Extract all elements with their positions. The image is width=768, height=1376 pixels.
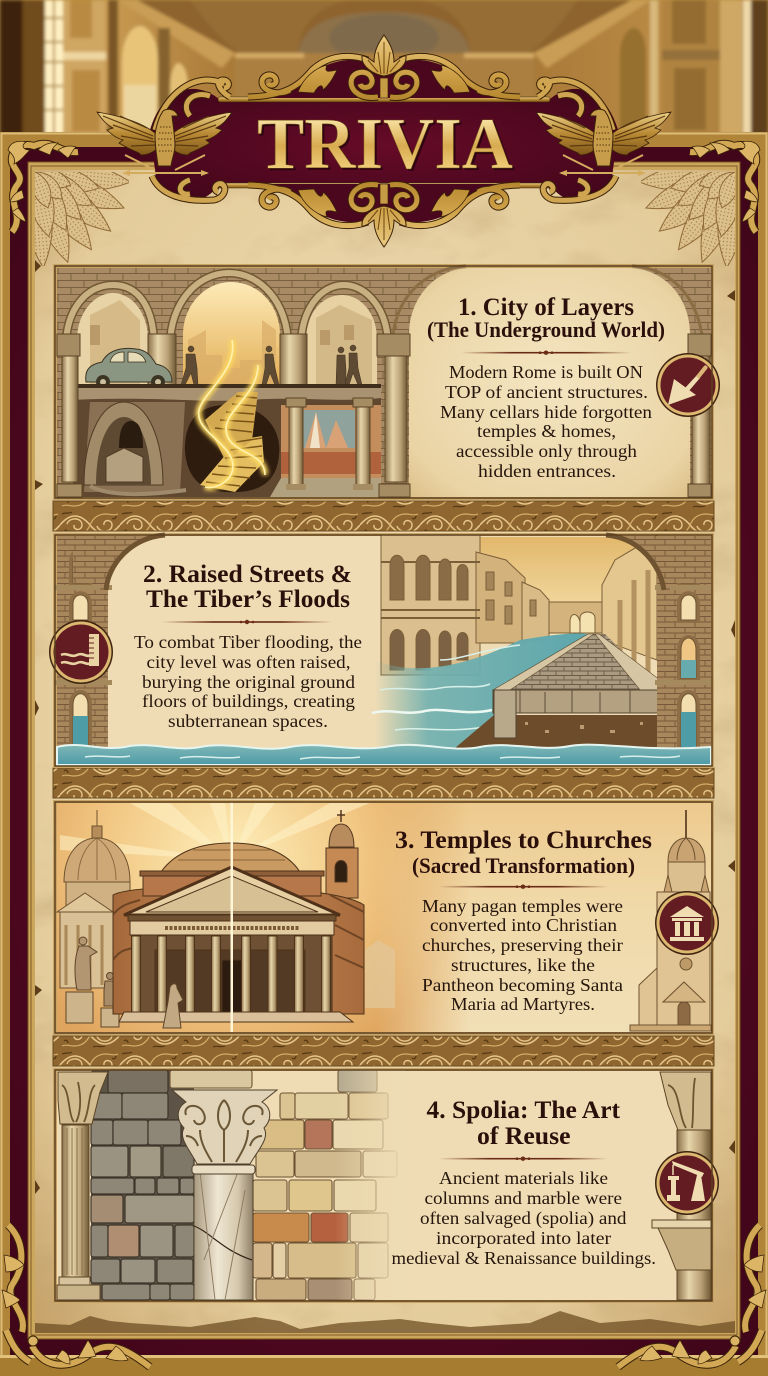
heading: The Tiber’s Floods: [146, 586, 350, 613]
body text: hidden entrances.: [478, 461, 616, 481]
illustration: left fluted column: [57, 1072, 108, 1300]
divider: [438, 884, 608, 889]
text panel: parchment arch: [409, 268, 690, 497]
people: [181, 345, 362, 385]
icon: left eagle: [97, 109, 232, 176]
buildings: [381, 535, 657, 675]
right column: [688, 334, 711, 497]
brick arch spandrels: [57, 535, 711, 590]
left brick tower: [54, 536, 112, 748]
heading: 4. Spolia: The Art: [426, 1097, 621, 1124]
heading: of Reuse: [477, 1123, 570, 1150]
panel 3: Temples to Churches: [53, 800, 719, 1035]
heading: [427, 294, 665, 342]
icon: trowel: [656, 353, 720, 417]
body text: converted into Christian: [430, 915, 617, 935]
illustration: left dome and temple: [57, 810, 130, 988]
body text: structures, like the: [451, 955, 595, 975]
corner mandala: top right: [638, 159, 748, 269]
icon: crane and column: [655, 1151, 719, 1215]
corner scroll: bottom right: [618, 1225, 766, 1367]
panel 4: Spolia: [53, 1068, 719, 1303]
body text: temples & homes,: [477, 421, 616, 441]
title banner: [97, 35, 671, 247]
water band: [57, 745, 711, 765]
body text: medieval & Renaissance buildings.: [392, 1248, 656, 1268]
body text: incorporated into later: [436, 1228, 611, 1248]
heading: [143, 561, 352, 613]
body text: Pantheon becoming Santa: [422, 975, 623, 995]
ornamental band 2: [53, 768, 714, 798]
title shadow: TRIVIA: [259, 105, 515, 186]
fade of wall into parchment: [335, 1070, 405, 1300]
heading: 2. Raised Streets &: [143, 561, 352, 588]
corner mandala: top left: [22, 159, 132, 269]
illustration: distant building: [365, 940, 395, 1008]
icon: temple: [655, 891, 719, 955]
illustration: bell tower: [326, 810, 358, 898]
ornamental band 1: [53, 501, 714, 531]
center column: [377, 334, 410, 497]
car: [86, 348, 172, 389]
background: palace interior: [0, 0, 768, 145]
arch: left and right curves: [106, 535, 664, 590]
body text: Modern Rome is built ON: [449, 362, 643, 382]
body text: burying the original ground: [142, 672, 355, 692]
body text: often salvaged (spolia) and: [420, 1208, 626, 1229]
illustration: statues: [66, 937, 119, 1027]
illustration: dividing light line: [230, 802, 233, 1032]
body text: columns and marble were: [424, 1188, 622, 1208]
sun rays: [60, 803, 370, 860]
illustration: Pantheon: [113, 843, 364, 1022]
corner scroll: top left: [8, 141, 78, 232]
illustration: street over underground ruins: [57, 268, 711, 497]
heading: [426, 1097, 621, 1150]
ornament: bottom crest: [248, 184, 520, 247]
illustration: marble column: [172, 1090, 277, 1300]
divider: [438, 1156, 608, 1161]
body text: Ancient materials like: [439, 1168, 608, 1188]
heading: 1. City of Layers: [458, 294, 634, 321]
body text: [134, 632, 362, 731]
ornament: top crest: [248, 35, 520, 98]
ornament: left side scrolls: [152, 80, 230, 200]
body text: Maria ad Martyres.: [451, 994, 595, 1014]
heading: [395, 827, 652, 878]
heading: (Sacred Transformation): [412, 853, 635, 878]
icon: water level gauge: [49, 620, 113, 684]
panel 1: City of Layers: [53, 264, 720, 500]
body text: Many pagan temples were: [422, 896, 623, 916]
body text: city level was often raised,: [146, 652, 350, 672]
title: TRIVIA: [257, 103, 513, 184]
illustration: right church: [630, 810, 711, 1031]
body text: [422, 896, 623, 1014]
right brick tower: [655, 536, 711, 748]
illustration: warm stone wall: [170, 1070, 397, 1300]
ornament: right side scrolls: [538, 80, 616, 200]
body text: [440, 362, 652, 481]
body text: Many cellars hide forgotten: [440, 402, 652, 422]
illustration: right column: [652, 1072, 711, 1300]
left column: [57, 334, 82, 497]
body text: [392, 1168, 656, 1268]
corner scroll: top right: [690, 141, 760, 232]
divider: [461, 350, 631, 355]
illustration: flooded street: [372, 535, 660, 750]
panel 2: Raised Streets and Tiber Floods: [49, 533, 714, 768]
body text: churches, preserving their: [422, 935, 623, 955]
illustration: gray stone wall: [91, 1070, 194, 1300]
divider: [162, 620, 332, 624]
heading: 3. Temples to Churches: [395, 827, 652, 854]
body text: subterranean spaces.: [168, 711, 328, 731]
icon: right eagle: [536, 109, 671, 176]
illustration: small statue on steps: [163, 984, 183, 1028]
stairs: [199, 340, 265, 492]
corner scroll: bottom left: [2, 1225, 150, 1367]
body text: floors of buildings, creating: [142, 691, 355, 711]
body text: accessible only through: [456, 441, 637, 461]
parchment background: [35, 170, 735, 1333]
body text: To combat Tiber flooding, the: [134, 632, 362, 652]
body text: TOP of ancient structures.: [445, 382, 648, 402]
ornamental band 3: [53, 1036, 714, 1066]
heading: (The Underground World): [427, 317, 665, 342]
